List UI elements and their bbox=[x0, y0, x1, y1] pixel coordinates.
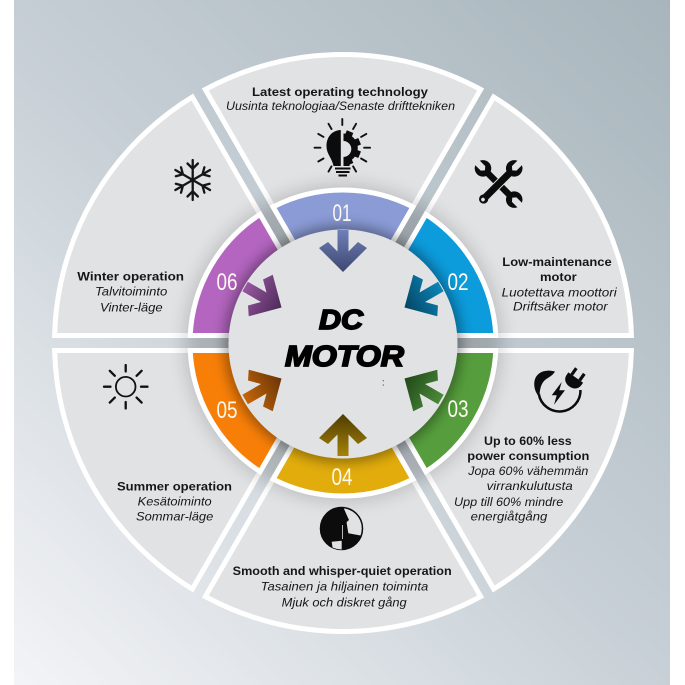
text: power consumption: Up to 60% less bbox=[484, 434, 572, 448]
text: power consumption: Upp till 60% mindre bbox=[454, 495, 564, 509]
segment 05 bbox=[190, 350, 330, 472]
segment 02 bbox=[356, 214, 496, 336]
arrow 03 bbox=[392, 358, 453, 420]
title: DC MOTOR: MOTOR bbox=[285, 341, 404, 373]
text: low-maintenance motor bbox=[502, 255, 617, 314]
text: summer operation: Sommar-läge bbox=[136, 510, 214, 524]
icon: sun bbox=[104, 365, 148, 408]
small red mark bbox=[382, 380, 384, 386]
panel: summer operation bbox=[55, 350, 330, 589]
icon: quiet finger bbox=[320, 506, 364, 550]
icon: bulb and gear bbox=[314, 119, 370, 176]
arrow 06 bbox=[233, 266, 294, 328]
panel: power consumption bbox=[356, 350, 631, 589]
arrow 05 bbox=[233, 358, 294, 420]
number 06: 06 bbox=[216, 269, 238, 296]
arrow 01 bbox=[319, 230, 367, 272]
text: whisper-quiet operation bbox=[233, 564, 452, 610]
text: power consumption: virrankulutusta bbox=[487, 479, 573, 493]
text: whisper-quiet operation: Mjuk och diskret gång bbox=[282, 596, 407, 610]
center circle bbox=[228, 230, 458, 458]
icon: snowflake bbox=[173, 160, 213, 200]
panel: latest operating technology bbox=[205, 55, 481, 328]
number 03: 03 bbox=[448, 396, 468, 423]
text: summer operation: Summer operation bbox=[117, 480, 232, 494]
segment 01 bbox=[273, 190, 413, 328]
text: power consumption bbox=[454, 434, 589, 524]
arrow 04 bbox=[319, 414, 367, 456]
arrow 02 bbox=[392, 266, 453, 328]
text: low-maintenance motor: Low-maintenance bbox=[502, 255, 612, 269]
number 02: 02 bbox=[448, 269, 468, 296]
number 05: 05 bbox=[216, 397, 238, 424]
text: winter operation: Talvitoiminto bbox=[95, 284, 168, 298]
title: DC MOTOR bbox=[285, 304, 404, 373]
text: power consumption: power consumption bbox=[467, 449, 589, 463]
text: low-maintenance motor: motor bbox=[540, 270, 577, 284]
icon: crossed wrenches bbox=[470, 155, 527, 213]
segment 06 bbox=[190, 214, 330, 336]
text: low-maintenance motor: Driftsäker motor bbox=[513, 300, 609, 314]
number 04: 04 bbox=[332, 464, 352, 491]
panel: winter operation bbox=[55, 97, 330, 336]
text: winter operation: Vinter-läge bbox=[100, 300, 163, 314]
panel: low-maintenance motor bbox=[356, 97, 631, 336]
center shadow bbox=[224, 225, 462, 463]
text: power consumption: Jopa 60% vähemmän bbox=[467, 464, 589, 478]
text: power consumption: energiåtgång bbox=[471, 510, 548, 524]
text: winter operation bbox=[77, 270, 184, 314]
text: summer operation bbox=[117, 480, 232, 524]
segment 04 bbox=[273, 358, 413, 496]
icon: eco plug bbox=[534, 366, 588, 411]
panel: whisper-quiet operation bbox=[205, 358, 481, 631]
text: whisper-quiet operation: Tasainen ja hiljainen toiminta bbox=[261, 580, 429, 594]
title: DC MOTOR: DC bbox=[319, 304, 364, 335]
text: winter operation: Winter operation bbox=[77, 270, 184, 284]
text: latest operating technology bbox=[226, 85, 455, 113]
text: whisper-quiet operation: Smooth and whisper-quiet operation bbox=[233, 564, 452, 578]
text: latest operating technology: Uusinta teknologiaa/Senaste drifttekniken bbox=[226, 99, 455, 113]
text: summer operation: Kesätoiminto bbox=[138, 494, 212, 508]
segment 03 bbox=[356, 350, 496, 472]
ring shadow bbox=[185, 185, 501, 501]
number 01: 01 bbox=[332, 200, 352, 227]
text: low-maintenance motor: Luotettava moottori bbox=[502, 286, 617, 300]
text: latest operating technology: Latest operating technology bbox=[252, 85, 428, 99]
